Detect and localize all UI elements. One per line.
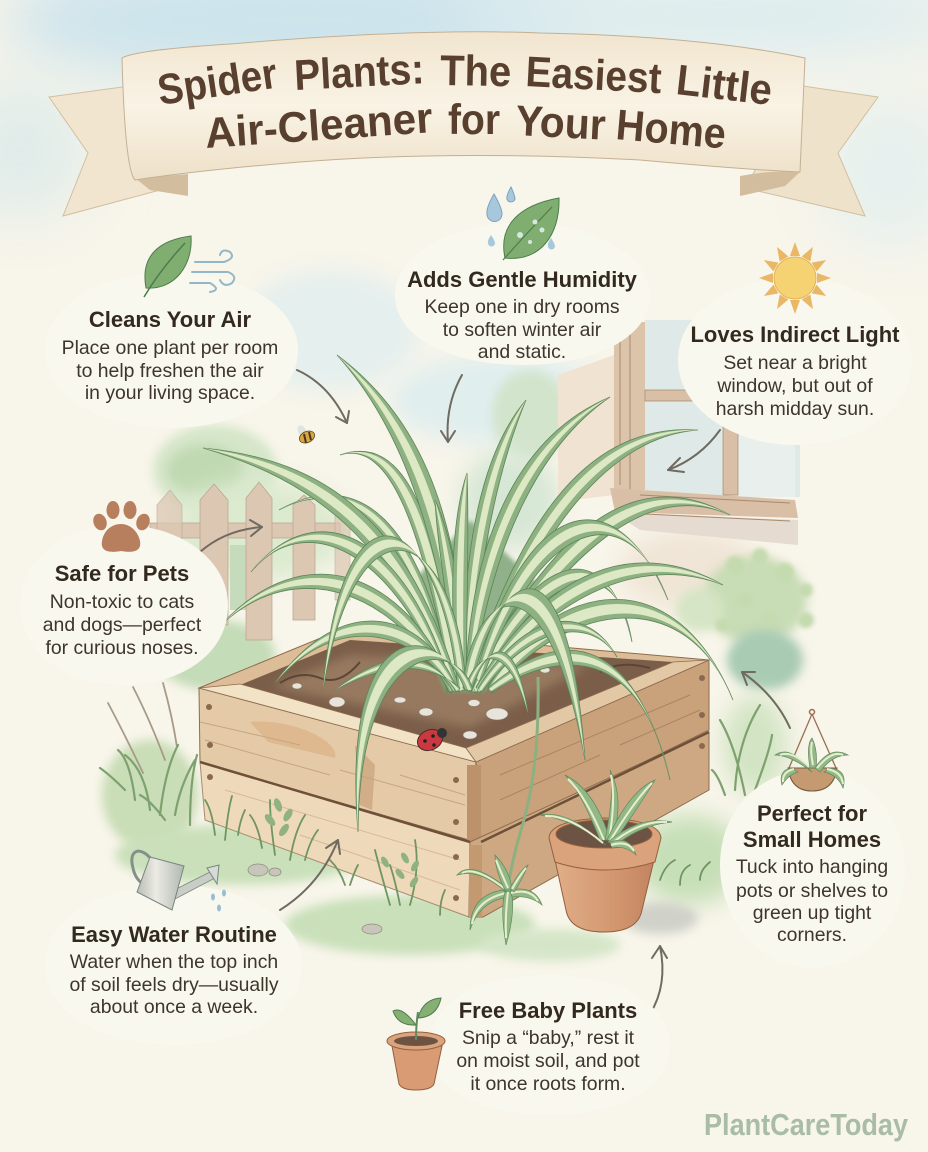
- panel: free baby plants: Snip a “baby,” rest it: [462, 1027, 635, 1049]
- panel: cleans your air: Place one plant per room: [62, 337, 278, 359]
- panel: easy water routine: of soil feels dry—usually: [69, 974, 279, 996]
- title text: Little: [674, 56, 775, 115]
- title banner: [49, 32, 878, 216]
- panel: perfect for small homes: corners.: [777, 924, 847, 946]
- panel: cleans your air: to help freshen the air: [76, 360, 264, 382]
- panel: safe for pets: for curious noses.: [45, 637, 199, 659]
- icon: seedling in pot: [387, 998, 445, 1090]
- panel: free baby plants: it once roots form.: [470, 1073, 626, 1095]
- title text: The: [440, 47, 512, 96]
- panel: perfect for small homes: Small Homes: [743, 827, 881, 852]
- panel: adds gentle humidity: [395, 222, 650, 365]
- title text: Spider: [154, 50, 280, 115]
- bed: upper right face: [476, 660, 709, 842]
- fence: [150, 482, 350, 640]
- banner: left fold: [135, 174, 188, 196]
- panel: safe for pets: Safe for Pets: [55, 561, 189, 586]
- title text: Air-Cleaner: [203, 94, 434, 158]
- panel: loves indirect light: [678, 278, 912, 445]
- bed: lower right face: [469, 732, 709, 917]
- panel: perfect for small homes: green up tight: [753, 902, 872, 924]
- arrow: light to window: [668, 430, 720, 472]
- icon: hanging basket: [775, 710, 848, 791]
- panel: safe for pets: Non-toxic to cats: [50, 591, 194, 613]
- raised garden bed: [199, 628, 709, 917]
- title text: Your: [514, 97, 607, 150]
- spider plant: [203, 355, 733, 832]
- panel: cleans your air: in your living space.: [85, 382, 255, 404]
- panel: loves indirect light: harsh midday sun.: [716, 398, 874, 420]
- panel: loves indirect light: Loves Indirect Light: [690, 322, 900, 347]
- icon: leaf and wind: [144, 236, 234, 297]
- panel: loves indirect light: Set near a bright: [723, 352, 867, 374]
- banner: right ribbon tail: [745, 86, 878, 216]
- panel: cleans your air: [45, 272, 298, 428]
- panel: free baby plants: Free Baby Plants: [459, 998, 637, 1023]
- icon: watering can: [132, 851, 226, 912]
- window: [558, 320, 800, 545]
- banner: left ribbon tail: [49, 86, 160, 216]
- panel: adds gentle humidity: Adds Gentle Humidity: [407, 267, 638, 292]
- stones: [248, 864, 382, 934]
- bed: back rim and soil: [199, 628, 709, 760]
- ladybug: [414, 725, 447, 755]
- grass and weeds: [100, 683, 772, 915]
- arrow: air to plant: [297, 370, 349, 423]
- title text: for: [448, 96, 500, 144]
- title text: Easiest: [524, 48, 663, 103]
- icon: paw print: [91, 501, 152, 552]
- panel: perfect for small homes: pots or shelves to: [736, 880, 888, 902]
- title text: Home: [614, 101, 728, 159]
- arrow: water to bed: [280, 840, 340, 910]
- terracotta pot with small plant: [540, 770, 672, 932]
- banner: right fold: [740, 172, 800, 196]
- panel: easy water routine: Easy Water Routine: [71, 922, 277, 947]
- panel: perfect for small homes: [720, 770, 905, 968]
- bed: lower left face: [200, 762, 470, 917]
- panel: safe for pets: [20, 525, 228, 685]
- leafy sprigs: [263, 797, 421, 889]
- panel: adds gentle humidity: Keep one in dry rooms: [424, 296, 620, 318]
- panel: perfect for small homes: Tuck into hanging: [736, 856, 888, 878]
- panel: cleans your air: Cleans Your Air: [89, 307, 252, 332]
- garden scenery backdrop: [102, 370, 814, 961]
- arrow: humidity to plant: [441, 375, 462, 442]
- title text: [154, 45, 775, 159]
- panel: safe for pets: and dogs—perfect: [43, 614, 202, 636]
- icon: leaf and water drops: [487, 187, 559, 260]
- arrow: pets to fence: [200, 520, 262, 552]
- bed: upper left face: [199, 688, 476, 840]
- panel: perfect for small homes: Perfect for: [757, 801, 867, 826]
- runner and baby plant: [457, 677, 542, 945]
- icon: sun: [759, 242, 831, 314]
- banner: main band: [122, 32, 805, 180]
- panel: easy water routine: Water when the top inch: [70, 951, 278, 973]
- panel: easy water routine: about once a week.: [90, 996, 258, 1018]
- panel: adds gentle humidity: to soften winter air: [443, 319, 602, 341]
- panel: adds gentle humidity: and static.: [478, 341, 566, 363]
- panel: easy water routine: [45, 885, 302, 1045]
- panel: free baby plants: [430, 975, 670, 1115]
- arrow: baby plants to pot: [650, 946, 667, 1014]
- title text: Plants:: [293, 45, 425, 100]
- panel: free baby plants: on moist soil, and pot: [456, 1050, 640, 1072]
- panel: loves indirect light: window, but out of: [716, 375, 873, 397]
- arrow: small homes to bush: [742, 672, 790, 728]
- bee: [296, 424, 317, 445]
